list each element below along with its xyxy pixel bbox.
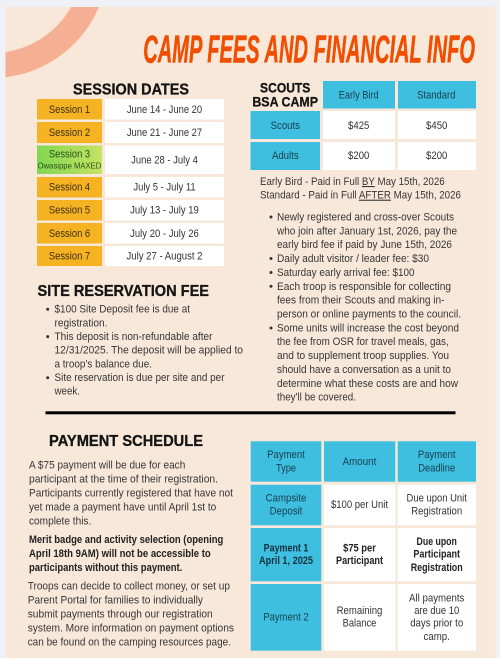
bullet list: fee details: the fee from OSR for travel meals, gas, — [277, 336, 449, 348]
bullet list: site reservation: 12/31/2025. The deposit will be applied to — [54, 345, 243, 357]
paragraph: payment due: yet made a payment have until April 1st to — [29, 501, 216, 513]
panel: session dates — [37, 82, 224, 266]
heading: session dates: SESSION DATES — [73, 82, 189, 99]
bullet list: fee details — [270, 212, 461, 404]
bullet list: site reservation: week. — [54, 386, 80, 398]
session 6 row — [37, 223, 224, 244]
session 3 row: Owasippe MAXED — [38, 161, 101, 171]
payment 2 row: Remaining — [337, 605, 382, 617]
heading: scouts bsa camp — [252, 80, 318, 109]
bullet list: site reservation — [46, 304, 243, 398]
scouts row: $425 — [348, 120, 369, 132]
heading: scouts bsa camp: BSA CAMP — [252, 93, 318, 109]
session 6 row: Session 6 — [49, 228, 90, 240]
paragraph: payment options: can be found on the camping resources page. — [28, 636, 231, 648]
heading: payment schedule: PAYMENT SCHEDULE — [49, 433, 203, 450]
session 4 row: July 5 - July 11 — [133, 182, 196, 194]
payment table header row: Amount — [343, 456, 376, 468]
paragraph: payment options: Parent Portal for families to individually — [28, 594, 203, 606]
paragraph: payment due: participant at the time of their registration. — [29, 474, 218, 486]
bullet list: fee details: should have a conversation as a unit to — [277, 364, 451, 376]
campsite deposit row: Due upon Unit — [407, 492, 467, 504]
bullet list: fee details: who join after January 1st, 2026, pay the — [276, 225, 457, 237]
paragraph: payment options: Troops can decide to collect money, or set up — [28, 581, 230, 593]
early bird and standard deadlines — [260, 176, 461, 202]
payment 2 row — [251, 584, 476, 651]
payment 2 row: camp. — [424, 631, 450, 643]
paragraph: payment options: system. More information on payment options — [28, 622, 234, 634]
payment 2 row: days prior to — [410, 618, 463, 630]
paragraph: payment due: complete this. — [29, 515, 91, 527]
bullet list: site reservation: This deposit is non-refundable after — [54, 331, 213, 343]
table header cells: Early Bird — [339, 89, 379, 101]
table header cells — [323, 81, 476, 108]
bullet list: site reservation: a troop's balance due. — [54, 358, 152, 370]
heading: site reservation fee: SITE RESERVATION FEE — [38, 283, 209, 300]
early bird and standard deadlines: Standard - Paid in Full AFTER May 15th, 2026 — [260, 190, 461, 202]
session 3 row — [37, 146, 224, 174]
adults row: $200 — [426, 150, 447, 162]
panel: scouts bsa camp fee table — [250, 80, 476, 170]
bullet list: fee details: determine what these costs are and how — [277, 378, 458, 390]
campsite deposit row: Campsite — [266, 492, 306, 504]
panel: site reservation fee — [38, 283, 243, 398]
panel: payment table — [251, 441, 476, 651]
paragraph: payment due — [29, 460, 233, 527]
payment 2 row: Payment 2 — [263, 611, 309, 623]
early bird and standard deadlines: Early Bird - Paid in Full BY May 15th, 2026 — [260, 176, 445, 188]
campsite deposit row: Registration — [411, 505, 462, 517]
session 5 row: Session 5 — [49, 205, 90, 217]
bullet list: fee details: Saturday early arrival fee: $100 — [277, 267, 414, 279]
bullet list: fee details: and to supplement troop supplies. You — [277, 350, 449, 362]
session 2 row — [37, 122, 224, 143]
bullet list: fee details: Daily adult visitor / leader fee: $30 — [277, 253, 429, 265]
payment 1 row: Registration — [411, 562, 463, 574]
session 3 row: Session 3 — [49, 149, 90, 161]
session 1 row: Session 1 — [49, 104, 90, 116]
scouts row: Scouts — [271, 120, 300, 132]
bullet list: fee details: they'll be covered. — [277, 392, 356, 404]
scouts row — [250, 111, 476, 139]
payment 1 row — [251, 528, 476, 581]
panel: payment schedule — [28, 433, 234, 648]
bullet list: fee details: Some units will increase the cost beyond — [277, 322, 459, 334]
heading: scouts bsa camp: SCOUTS — [260, 80, 310, 96]
bullet list: site reservation: $100 Site Deposit fee is due at — [54, 304, 190, 316]
session 2 row: June 21 - June 27 — [127, 127, 202, 139]
session 3 row: June 28 - July 4 — [131, 154, 198, 166]
payment table header row: Type — [276, 462, 296, 474]
bullet list: site reservation: registration. — [54, 318, 108, 330]
campsite deposit row: Deposit — [270, 505, 302, 517]
decorative corner arc — [0, 0, 96, 66]
adults row — [250, 142, 476, 170]
session 1 row — [37, 99, 224, 120]
bullet list: fee details: Each troop is responsible for collecting — [277, 281, 451, 293]
bullet list: site reservation: Site reservation is due per site and per — [54, 372, 225, 384]
adults row: $200 — [348, 150, 369, 162]
payment 2 row: are due 10 — [414, 605, 459, 617]
session 4 row — [37, 177, 224, 198]
session 6 row: July 20 - July 26 — [130, 228, 199, 240]
session 1 row: June 14 - June 20 — [127, 104, 202, 116]
campsite deposit row: $100 per Unit — [331, 499, 388, 511]
payment 1 row: Participant — [413, 549, 460, 561]
session 7 row: Session 7 — [49, 250, 90, 262]
session 5 row: July 13 - July 19 — [130, 205, 199, 217]
session 5 row — [37, 200, 224, 220]
paragraph: payment options — [28, 581, 234, 648]
bullet list: fee details: Newly registered and cross-over Scouts — [277, 212, 454, 224]
paragraph: merit badge warning: participants without this payment. — [29, 562, 182, 574]
payment 2 row: Balance — [343, 618, 376, 630]
table header cells: Standard — [417, 89, 455, 101]
payment 1 row: April 1, 2025 — [259, 555, 313, 567]
payment table header row: Payment — [418, 449, 456, 461]
session 7 row: July 27 - August 2 — [126, 250, 202, 262]
session 7 row — [37, 246, 224, 266]
payment 1 row: Payment 1 — [264, 542, 308, 554]
scouts row: $450 — [426, 120, 447, 132]
payment table header row — [251, 441, 476, 482]
bullet list: fee details: person or online payments to the council. — [277, 308, 461, 320]
session 2 row: Session 2 — [49, 127, 90, 139]
payment 1 row: Due upon — [417, 536, 457, 548]
bullet list: fee details: fees from their Scouts and making in- — [277, 295, 445, 307]
campsite deposit row — [251, 485, 476, 525]
payment table header row: Deadline — [418, 462, 455, 474]
payment 1 row: Participant — [336, 555, 383, 567]
paragraph: payment due: Participants currently registered that have not — [29, 487, 233, 499]
payment 1 row: $75 per — [343, 542, 376, 554]
paragraph: payment due: A $75 payment will be due for each — [29, 460, 185, 472]
session 4 row: Session 4 — [49, 182, 90, 194]
payment 2 row: All payments — [409, 592, 465, 604]
paragraph: payment options: submit payments through our registration — [28, 608, 213, 620]
paragraph: merit badge warning: April 18th 9AM) will not be accessible to — [29, 548, 211, 560]
adults row: Adults — [272, 150, 299, 162]
bullet list: fee details: early bird fee if paid by June 15th, 2026 — [277, 239, 452, 251]
paragraph: merit badge warning: Merit badge and activity selection (opening — [29, 534, 223, 546]
paragraph: merit badge warning — [29, 534, 223, 574]
payment table header row: Payment — [267, 449, 305, 461]
